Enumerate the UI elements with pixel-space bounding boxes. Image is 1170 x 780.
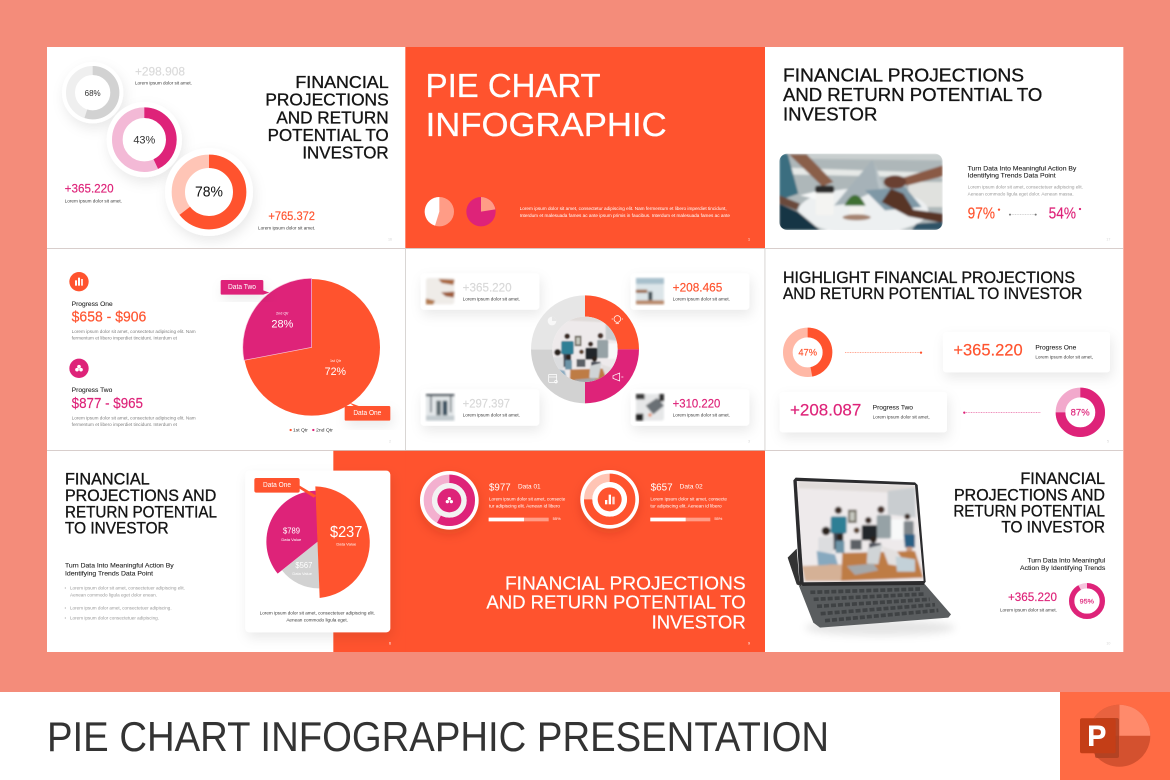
icon: pink pie xyxy=(466,197,496,226)
legend: 2nd Qtr xyxy=(316,428,334,433)
icon: pie xyxy=(548,317,556,325)
donut 68%: 68% xyxy=(85,88,101,98)
tablet mockup xyxy=(785,474,955,636)
progress two xyxy=(72,387,196,427)
panel: slide 2 cover: 1 xyxy=(748,237,750,241)
subheading and text: Identifying Trends Data Point xyxy=(968,173,1056,180)
card: 310.220: Lorem ipsum dolor sit amet. xyxy=(673,412,730,417)
icon: white pie xyxy=(425,197,454,226)
card: 208.465: +208.465 xyxy=(673,280,723,294)
card caption xyxy=(260,610,375,622)
title xyxy=(486,572,746,632)
donut: data 01 xyxy=(420,471,479,530)
stats: data 01: tur adipiscing elit. Aenean id libero xyxy=(489,503,560,508)
pie chart xyxy=(243,278,380,416)
panel: slide 3 photo and stats: 17 xyxy=(1106,237,1110,241)
progress one: fermentum et libero imperdiet tincidunt. Interdum et xyxy=(72,336,178,341)
card: 208.465 xyxy=(631,273,749,310)
title: HIGHLIGHT FINANCIAL PROJECTIONS xyxy=(783,268,1075,287)
panel: slide 8 orange data xyxy=(405,451,765,652)
panel: slide 1 donuts xyxy=(47,47,406,249)
donut 47% xyxy=(788,332,827,372)
panel: slide 7 exploded pie xyxy=(47,451,406,652)
bullet list: Lorem ipsum dolor amet, consectetuer adipiscing. xyxy=(70,605,172,610)
card: 310.220 xyxy=(631,389,749,426)
progress two: fermentum et libero imperdiet tincidunt. Interdum et xyxy=(72,422,178,427)
stat: 365.220: +365.220 xyxy=(1008,590,1057,604)
progress two: Lorem ipsum dolor sit amet, consectetur adipiscing elit. Nam xyxy=(72,415,196,420)
title: PROJECTIONS xyxy=(265,90,389,110)
donut 87%: 87% xyxy=(1071,408,1090,418)
exploded pie chart: Data Value xyxy=(292,571,313,576)
card: progress one xyxy=(943,332,1110,372)
subheading and text xyxy=(968,165,1083,197)
bullet list xyxy=(65,585,185,620)
subheading and text: Turn Data Into Meaningful Action By xyxy=(968,165,1077,172)
donut 95% xyxy=(1072,586,1102,616)
icon: trio xyxy=(69,359,89,378)
title: PROJECTIONS AND xyxy=(65,486,216,505)
panel: slide 4 pie chart xyxy=(47,249,406,451)
donut 68% xyxy=(62,62,123,123)
stats: data 02: tur adipiscing elit. Aenean id libero xyxy=(650,503,722,508)
title: FINANCIAL PROJECTIONS xyxy=(783,64,1024,85)
panel: slide 1 donuts: 16 xyxy=(388,237,392,241)
panel: slide 9 tablet: 10 xyxy=(1106,641,1110,645)
subheading: Turn Data Into Meaningful xyxy=(1027,557,1106,564)
subheading xyxy=(65,563,174,577)
progress two: $877 - $965 xyxy=(72,396,143,412)
panel: slide 4 pie chart: 2 xyxy=(389,439,391,443)
bullet list: Lorem ipsum dolor consectetuer adipiscing. xyxy=(70,615,159,620)
card: 365.220 xyxy=(421,273,539,310)
arrow: pink xyxy=(963,411,1040,414)
legend: 1st Qtr xyxy=(293,428,309,433)
callout: data one: Data One xyxy=(353,410,381,417)
exploded pie chart: $789 xyxy=(283,526,301,535)
subheading and text: Aenean commodo ligula eget dolor. Aenean massa. xyxy=(968,192,1074,197)
stats: data 01: Lorem ipsum dolor sit amet, consecte xyxy=(489,496,566,501)
title: RETURN POTENTIAL xyxy=(953,501,1105,520)
exploded pie chart: $237 xyxy=(330,524,362,541)
cover title: PIE CHART xyxy=(426,68,601,105)
title xyxy=(265,72,389,163)
subheading: Identifying Trends Data Point xyxy=(65,570,153,577)
subheading: Action By Identifying Trends xyxy=(1020,565,1106,572)
callout: data one xyxy=(254,478,316,498)
donut 47%: 47% xyxy=(798,348,817,358)
panel: slide 6 highlight xyxy=(765,249,1123,451)
title: FINANCIAL xyxy=(295,72,389,92)
stats: data 01 xyxy=(489,483,566,521)
card: progress one: Lorem ipsum dolor sit amet, xyxy=(1035,355,1093,360)
title: POTENTIAL TO xyxy=(268,125,389,145)
callout: data one: Data One xyxy=(263,482,291,489)
panel: slide 3 photo and stats xyxy=(765,47,1123,249)
card: 297.397: Lorem ipsum dolor sit amet. xyxy=(463,412,520,417)
card: progress one: +365.220 xyxy=(953,341,1023,360)
stat: 365.220 xyxy=(65,181,122,203)
cover title: INFOGRAPHIC xyxy=(426,107,667,144)
card: 365.220: +365.220 xyxy=(463,280,512,294)
cover title xyxy=(426,68,667,144)
icon: bars xyxy=(69,272,89,291)
donut 43%: 43% xyxy=(133,134,155,146)
card caption: Aenean commodo ligula eget. xyxy=(286,617,348,622)
panel: slide 5 central donut with cards: 3 xyxy=(748,439,750,443)
stat: 365.220: +365.220 xyxy=(65,181,114,195)
stat: 765.372: Lorem ipsum dolor sit amet. xyxy=(258,225,315,230)
card: progress two: Lorem ipsum dolor sit amet, xyxy=(873,415,930,420)
stat: 298.908 xyxy=(135,64,192,85)
photo: team xyxy=(552,316,618,382)
arrow: orange xyxy=(845,351,922,354)
stat: 365.220: Lorem ipsum dolor sit amet. xyxy=(65,198,122,203)
pie chart: 2nd Qtr xyxy=(276,311,289,315)
title: AND RETURN xyxy=(276,107,389,127)
arrow: 97% to 54% xyxy=(1009,214,1037,216)
legend xyxy=(289,428,334,433)
cover text: Interdum et malesuada fames ac ante ipsum primis in faucibus. Interdum et malesuada fames ac ante xyxy=(520,213,730,218)
donut 78% xyxy=(165,148,253,236)
footer bar xyxy=(0,692,1060,780)
panel: slide 6 highlight: 5 xyxy=(1107,439,1109,443)
stats: data 02 xyxy=(650,483,727,521)
subheading xyxy=(1020,557,1106,572)
stat: 365.220 xyxy=(1000,590,1057,613)
title: INVESTOR xyxy=(652,611,746,632)
icon: bulb xyxy=(612,316,623,324)
card: 208.465: Lorem ipsum dolor sit amet. xyxy=(673,296,730,301)
stats: data 01: 55% xyxy=(553,516,561,521)
icon: calendar xyxy=(549,374,557,383)
stats: data 01: $977 xyxy=(489,483,511,494)
title xyxy=(65,470,217,538)
title: AND RETURN POTENTIAL TO INVESTOR xyxy=(783,284,1082,303)
stat: 765.372 xyxy=(258,209,315,230)
donut: four quadrants xyxy=(531,295,639,403)
pie chart: 1st Qtr xyxy=(330,359,342,363)
card: 365.220: Lorem ipsum dolor sit amet. xyxy=(463,296,520,301)
card: progress two: +208.087 xyxy=(790,401,861,420)
title xyxy=(783,64,1042,124)
stat: 298.908: +298.908 xyxy=(135,64,185,78)
card caption: Lorem ipsum dolor sit amet, consectetuer adipiscing elit. xyxy=(260,610,375,615)
footer title: PIE CHART INFOGRAPHIC PRESENTATION xyxy=(47,713,829,760)
subheading and text: Lorem ipsum dolor sit amet, consectetuer adipiscing elit. xyxy=(968,185,1083,190)
title: FINANCIAL PROJECTIONS xyxy=(505,572,746,593)
exploded pie chart xyxy=(266,486,370,598)
icon: megaphone xyxy=(613,373,623,381)
title xyxy=(953,469,1105,537)
stat: 54%: 54% xyxy=(1049,206,1076,223)
title: INVESTOR xyxy=(302,143,389,163)
stats: data 01: Data 01 xyxy=(518,485,541,491)
progress two: Progress Two xyxy=(72,387,113,394)
subheading: Turn Data Into Meaningful Action By xyxy=(65,563,174,570)
progress one: $658 - $906 xyxy=(72,310,146,326)
title: TO INVESTOR xyxy=(65,519,169,538)
card xyxy=(245,471,390,632)
photo: laptops on table xyxy=(779,154,943,234)
title: AND RETURN POTENTIAL TO xyxy=(783,84,1042,105)
pie chart: 28% xyxy=(271,319,294,331)
panel: slide 7 exploded pie: 6 xyxy=(389,641,391,645)
stat: 765.372: +765.372 xyxy=(268,209,315,223)
card: progress one: Progress One xyxy=(1035,345,1077,352)
exploded pie chart: Data Value xyxy=(281,537,302,542)
stat: 365.220: Lorem ipsum dolor sit amet. xyxy=(1000,608,1057,613)
cover text xyxy=(520,206,730,218)
stats: data 02: $657 xyxy=(651,483,673,494)
exploded pie chart: Data Value xyxy=(336,541,357,546)
donut 87% xyxy=(1060,392,1100,432)
pie chart: 72% xyxy=(325,366,347,378)
stats: data 02: Data 02 xyxy=(680,485,703,491)
card: progress two: Progress Two xyxy=(873,405,913,412)
card: 310.220: +310.220 xyxy=(673,396,721,410)
progress one: Progress One xyxy=(72,301,113,308)
title: PROJECTIONS AND xyxy=(954,485,1105,504)
card: progress two xyxy=(780,392,947,432)
title: TO INVESTOR xyxy=(1001,518,1105,537)
panel: slide 5 central donut with cards xyxy=(405,249,765,451)
title xyxy=(783,268,1082,303)
donut 95%: 95% xyxy=(1080,599,1094,606)
exploded pie chart: $567 xyxy=(295,561,313,570)
stat: 97%: 97% xyxy=(968,206,995,223)
callout: data two xyxy=(221,280,269,295)
donut 78%: 78% xyxy=(195,185,223,201)
progress one xyxy=(72,301,196,341)
title: FINANCIAL xyxy=(1020,469,1105,488)
title: INVESTOR xyxy=(783,103,877,124)
cover text: Lorem ipsum dolor sit amet, consectetur adipiscing elit. Nam fermentum et libero imperdiet tincidunt, xyxy=(520,206,727,211)
donut 43% xyxy=(107,102,182,177)
stats: data 02: Lorem ipsum dolor sit amet, consecte xyxy=(650,496,727,501)
panel: slide 8 orange data: 9 xyxy=(748,641,750,645)
panel: slide 2 cover xyxy=(405,47,765,249)
progress one: Lorem ipsum dolor sit amet, consectetur adipiscing elit. Nam xyxy=(72,329,196,334)
stats: data 02: 55% xyxy=(714,516,723,521)
donut: data 02 xyxy=(580,470,639,529)
title: FINANCIAL xyxy=(65,470,150,489)
bullet list: Aenean commodo ligula eget dolor enean. xyxy=(70,592,157,597)
title: AND RETURN POTENTIAL TO xyxy=(486,592,746,613)
stat: 298.908: Lorem ipsum dolor sit amet. xyxy=(135,80,192,85)
callout: data two: Data Two xyxy=(228,284,256,291)
panel: slide 9 tablet xyxy=(765,451,1123,652)
orange side band xyxy=(333,451,406,652)
callout: data one xyxy=(345,402,390,421)
card: 297.397 xyxy=(421,389,539,426)
card: 297.397: +297.397 xyxy=(463,396,510,410)
bullet list: Lorem ipsum dolor sit amet, consectetuer adipiscing elit. xyxy=(70,585,185,590)
title: RETURN POTENTIAL xyxy=(65,502,217,521)
icon: powerpoint logo xyxy=(1060,692,1170,780)
